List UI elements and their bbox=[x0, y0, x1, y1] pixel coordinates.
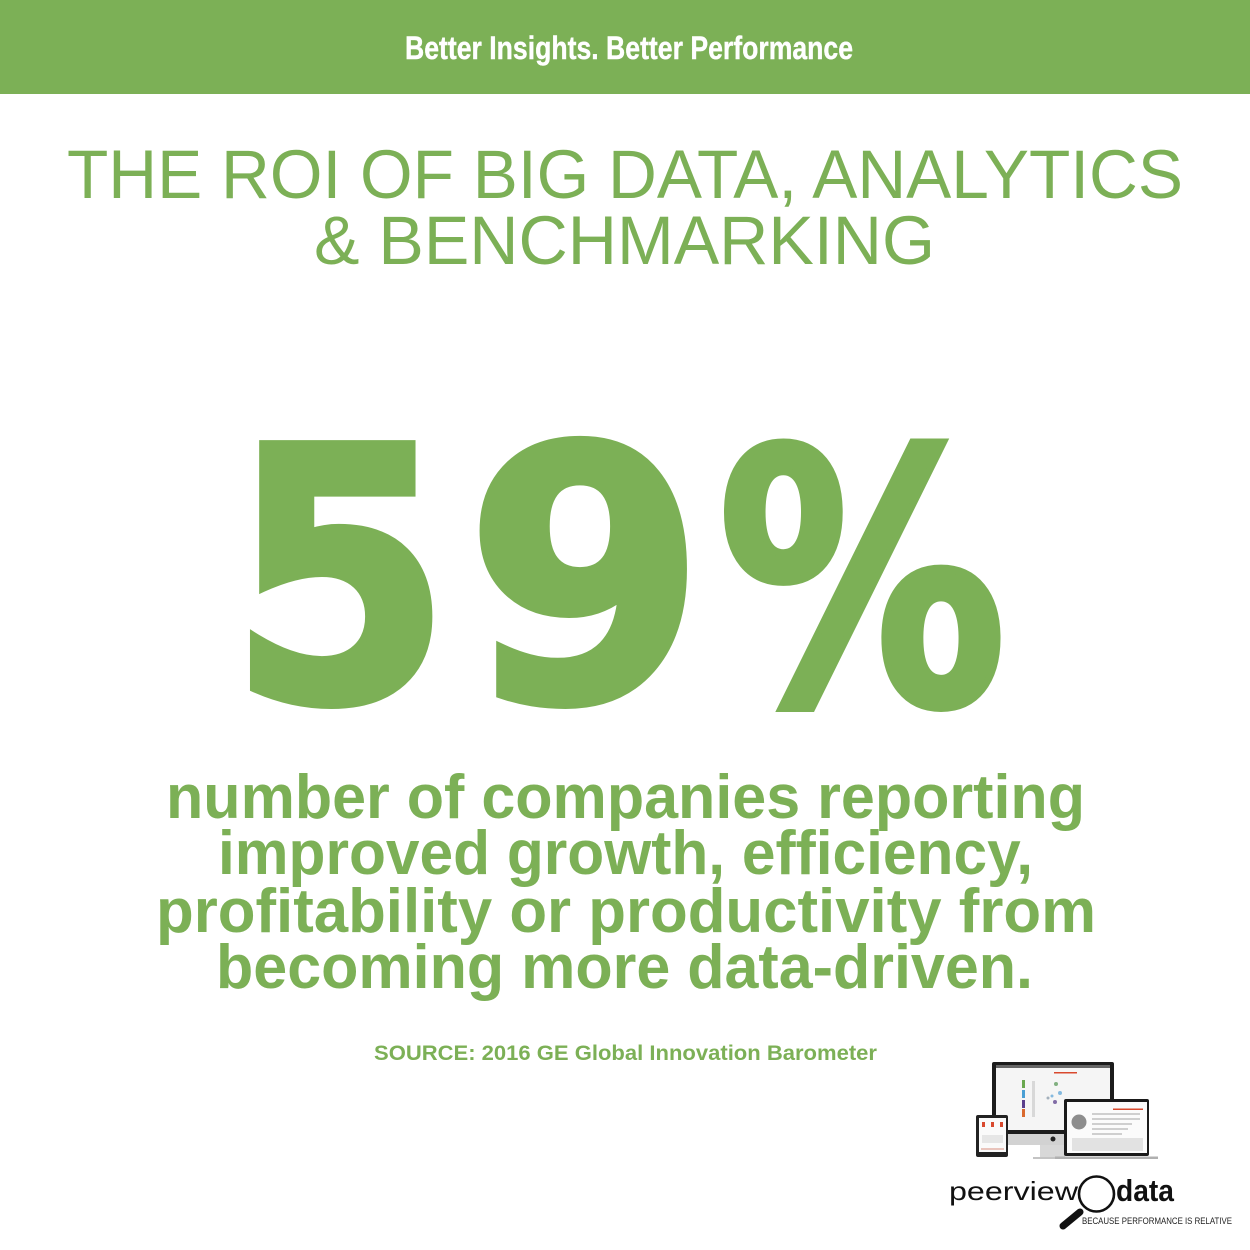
title: THE ROI OF BIG DATA, ANALYTICS bbox=[67, 136, 1183, 213]
big statistic: 59%: 9 bbox=[466, 374, 705, 783]
big statistic: 59% bbox=[229, 374, 1006, 786]
statistic description: number of companies reporting bbox=[166, 763, 1085, 832]
title bbox=[67, 136, 1183, 279]
icon: tablet bbox=[976, 1115, 1008, 1157]
statistic description: profitability or productivity from bbox=[156, 877, 1096, 946]
source note: SOURCE: 2016 GE Global Innovation Barometer bbox=[374, 1042, 877, 1065]
statistic description bbox=[156, 763, 1096, 1002]
header banner bbox=[0, 0, 1250, 94]
title: & BENCHMARKING bbox=[314, 202, 935, 279]
big statistic: 59%: 5 bbox=[229, 376, 451, 784]
logo: peerview data bbox=[949, 1173, 1232, 1227]
logo wordmark data: data bbox=[1116, 1173, 1175, 1208]
big statistic: 59%: % bbox=[718, 377, 1006, 786]
statistic description: improved growth, efficiency, bbox=[218, 819, 1033, 888]
icon: laptop bbox=[1055, 1099, 1158, 1159]
logo wordmark peerview: peerview bbox=[949, 1176, 1078, 1206]
statistic description: becoming more data-driven. bbox=[216, 933, 1033, 1002]
header tagline: Better Insights. Better Performance bbox=[405, 30, 853, 66]
icon: desktop monitor bbox=[992, 1062, 1114, 1159]
device mockups bbox=[976, 1062, 1158, 1159]
icon: magnifying glass bbox=[1063, 1176, 1114, 1226]
